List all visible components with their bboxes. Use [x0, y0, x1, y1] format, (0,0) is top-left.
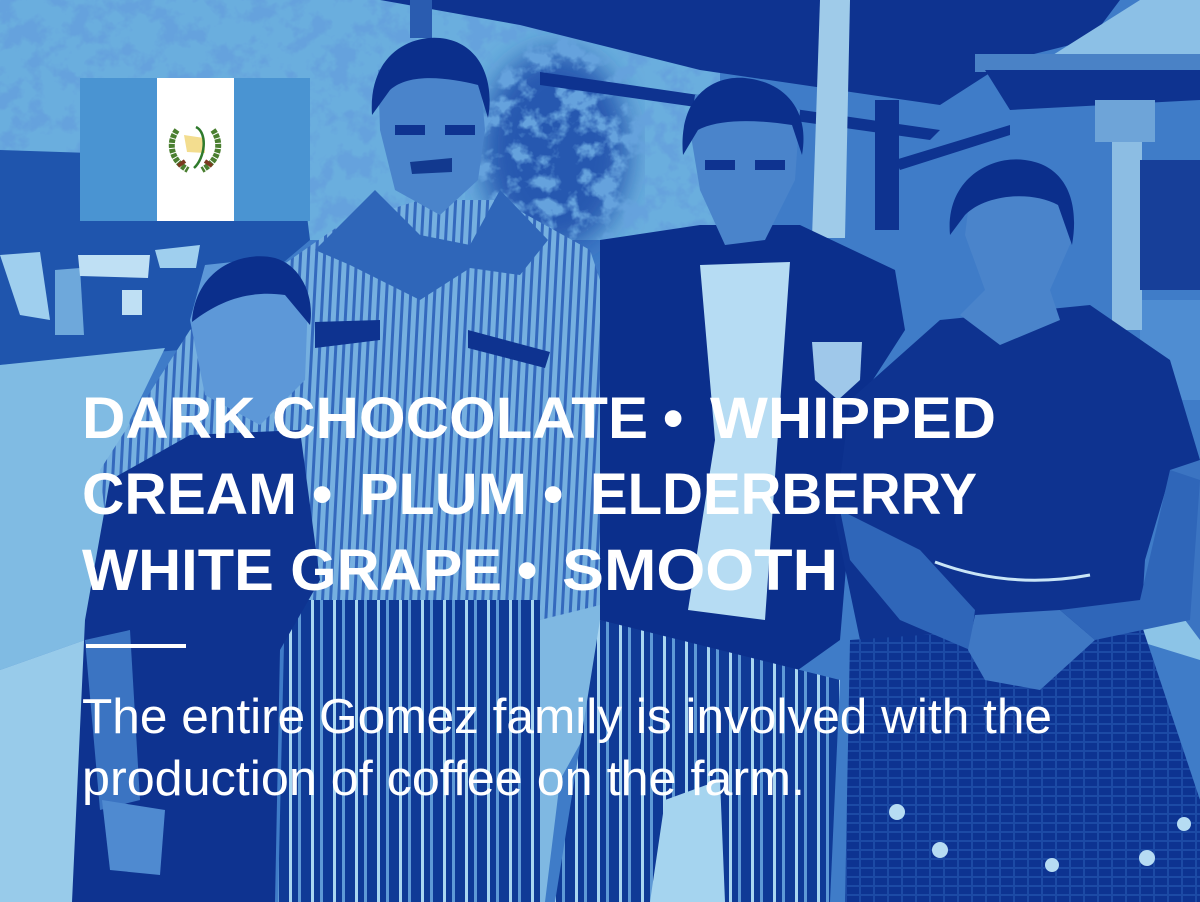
headline: tasting notes: •: [312, 462, 332, 527]
head of man in centre: [682, 78, 803, 245]
body text: description: production of coffee on the farm.: [82, 752, 805, 806]
headline: tasting notes: PLUM: [359, 462, 527, 527]
headline: tasting notes: [82, 386, 996, 603]
headline: tasting notes: •: [543, 462, 563, 527]
shed roof and timber posts: [380, 0, 1200, 330]
head of man on left: [372, 38, 490, 215]
divider rule: [86, 644, 186, 648]
icon: coat of arms: [172, 127, 218, 170]
sack at bottom centre: [650, 780, 725, 902]
headline: tasting notes: WHITE GRAPE: [82, 538, 502, 603]
flag of Guatemala: [80, 78, 310, 221]
headline: tasting notes: WHIPPED: [710, 386, 996, 451]
laundry on the line: [0, 245, 200, 335]
headline: tasting notes: ELDERBERRY: [590, 462, 977, 527]
man on left: [100, 38, 620, 902]
headline: tasting notes: DARK CHOCOLATE: [82, 386, 648, 451]
woman on right: [835, 159, 1200, 902]
boy on left: [72, 256, 320, 902]
body text: description: The entire Gomez family is involved with the: [82, 690, 1052, 744]
man in centre with varsity jacket: [555, 78, 905, 902]
body text: description: [82, 690, 1052, 806]
headline: tasting notes: CREAM: [82, 462, 297, 527]
headline: tasting notes: •: [517, 538, 537, 603]
headline: tasting notes: •: [663, 386, 683, 451]
headline: tasting notes: SMOOTH: [562, 538, 838, 603]
